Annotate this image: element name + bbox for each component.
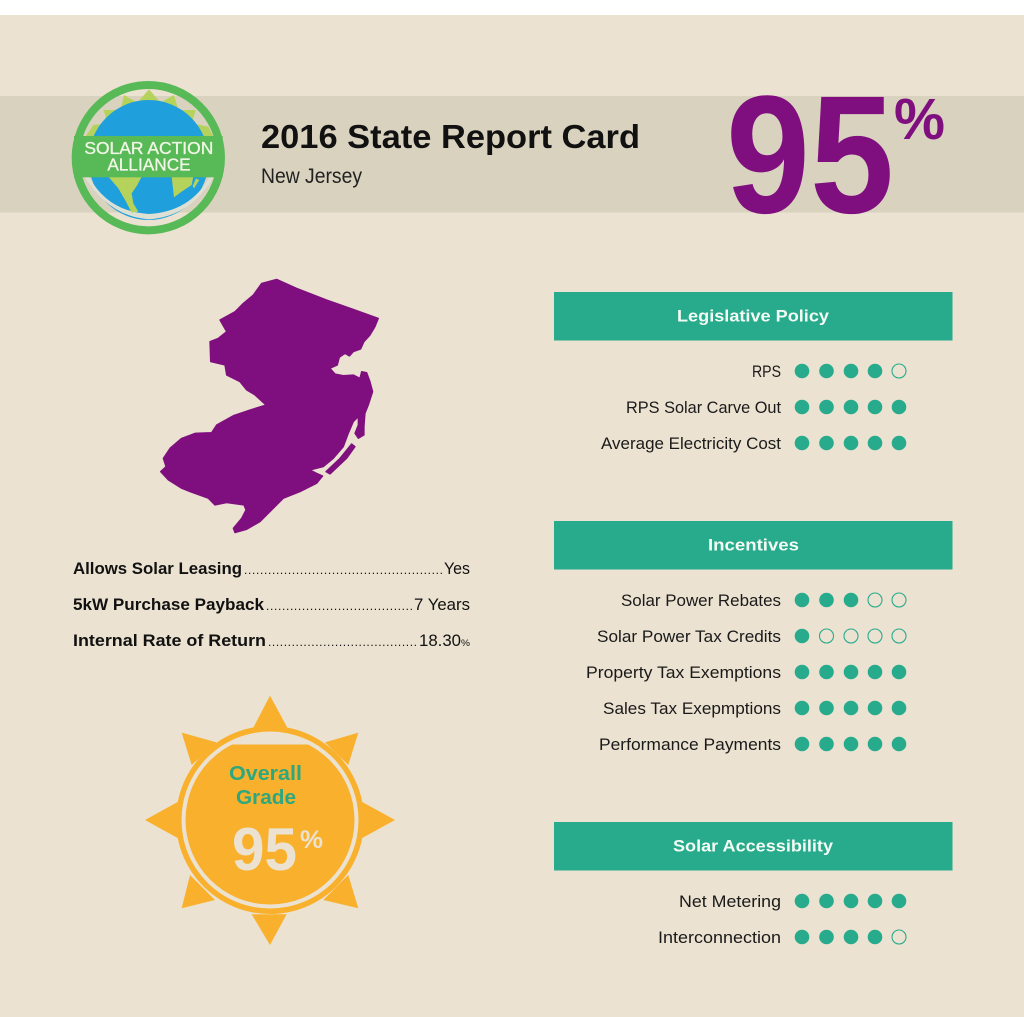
- row: RPS solar carve out: [626, 398, 906, 417]
- stat: rate of return: 18.30: [419, 631, 461, 650]
- badge: overall grade sun: [145, 696, 395, 945]
- stat: rate of return: [73, 631, 470, 650]
- stat: solar leasing: [73, 559, 470, 578]
- logo ribbon: [74, 136, 223, 177]
- row: performance payments: Performance Payments: [599, 735, 781, 754]
- panel: legislative policy: [554, 292, 952, 453]
- score percent sign: %: [894, 87, 945, 152]
- row: property tax exemptions: [586, 663, 906, 682]
- stat: rate of return: ......................................: [268, 635, 417, 649]
- stat: purchase payback: [73, 595, 470, 614]
- headline score: [726, 60, 945, 248]
- score number: 95: [726, 60, 894, 248]
- panel: incentives: Incentives: [708, 536, 799, 554]
- row: solar power rebates: Solar Power Rebates: [621, 591, 781, 610]
- stat: purchase payback: 7 Years: [414, 595, 470, 614]
- stat: solar leasing: Allows Solar Leasing: [73, 559, 242, 578]
- grade number: 95: [232, 816, 297, 883]
- row: interconnection: [658, 928, 906, 947]
- row: sales tax exemptions: [603, 699, 906, 718]
- stat: solar leasing: ..................................................: [244, 563, 443, 577]
- grade label: Overall: [229, 762, 302, 785]
- title: 2016 State Report Card: [261, 118, 640, 155]
- sun disc: [176, 726, 364, 914]
- logo name line 1: SOLAR ACTION: [84, 138, 213, 158]
- logo outer ring: [76, 85, 221, 230]
- icon: Solar Action Alliance logo: [74, 85, 223, 230]
- logo sun disc: [113, 113, 184, 184]
- grade percent: %: [300, 826, 323, 854]
- stat: rate of return: %: [461, 638, 470, 648]
- stat: purchase payback: 5kW Purchase Payback: [73, 595, 265, 614]
- sun inner fill: [186, 736, 354, 904]
- badge: overall grade sun: Grade: [236, 786, 296, 809]
- panel: incentives: [554, 521, 952, 754]
- sun rays: [145, 696, 395, 945]
- stat: purchase payback: .....................................: [266, 599, 413, 613]
- row: average electricity cost: Average Electricity Cost: [601, 434, 781, 453]
- section header: [554, 822, 952, 870]
- row: average electricity cost: [601, 434, 906, 453]
- header band: [0, 96, 1024, 212]
- row: net metering: Net Metering: [679, 892, 781, 911]
- logo sun ring: [109, 109, 188, 188]
- row: solar power rebates: [621, 591, 906, 610]
- row: interconnection: Interconnection: [658, 928, 781, 947]
- row: RPS: [752, 362, 906, 381]
- logo name line 2: ALLIANCE: [107, 155, 191, 175]
- sun inner ring: [182, 732, 358, 908]
- panel: legislative policy: Legislative Policy: [677, 306, 830, 326]
- section header: [554, 292, 952, 340]
- row: sales tax exemptions: Sales Tax Exepmptions: [603, 699, 781, 718]
- panel: solar accessibility: [554, 822, 952, 947]
- barrier island: [326, 444, 355, 474]
- logo globe: [85, 100, 213, 220]
- row: RPS solar carve out: RPS Solar Carve Out: [626, 398, 781, 417]
- row: property tax exemptions: Property Tax Exemptions: [586, 663, 781, 682]
- row: RPS: RPS: [752, 362, 781, 381]
- logo sun rays: [86, 90, 213, 136]
- row: net metering: [679, 892, 906, 911]
- section header: [554, 521, 952, 570]
- panel: solar accessibility: Solar Accessibility: [673, 836, 834, 856]
- row: performance payments: [599, 735, 906, 754]
- stat: rate of return: Internal Rate of Return: [73, 631, 266, 650]
- subtitle: state name: New Jersey: [261, 165, 362, 188]
- row: solar power tax credits: [597, 627, 906, 646]
- state outline: [161, 279, 378, 533]
- map: New Jersey: [161, 279, 378, 533]
- stats list: [73, 559, 470, 650]
- row: solar power tax credits: Solar Power Tax Credits: [597, 627, 781, 646]
- stat: solar leasing: Yes: [444, 559, 470, 578]
